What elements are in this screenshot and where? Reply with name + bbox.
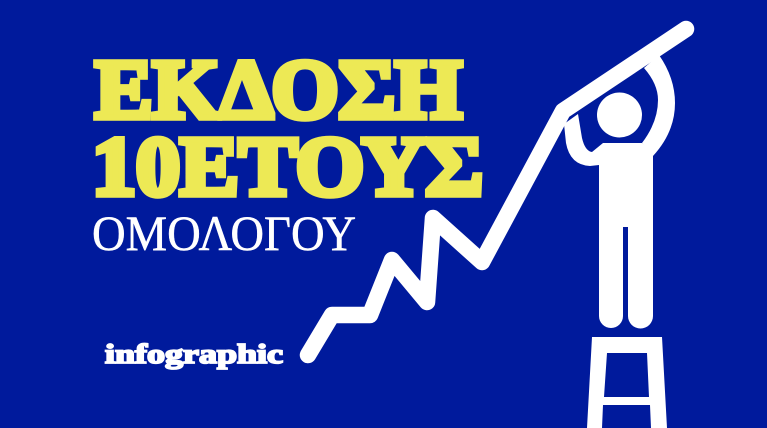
title line 2: 10ΕΤΟΥΣ — [92, 120, 483, 214]
person raised arm — [642, 55, 675, 156]
stool — [587, 337, 667, 428]
rising line chart arrow — [308, 29, 686, 355]
subtitle: ΟΜΟΛΟΓΟΥ — [92, 205, 356, 261]
infographic label: infographic — [105, 339, 283, 369]
title line 1: ΕΚΔΟΣΗ — [95, 44, 462, 136]
person head — [597, 92, 642, 138]
icon: person standing on stool — [564, 55, 675, 428]
person body and legs — [564, 114, 653, 328]
